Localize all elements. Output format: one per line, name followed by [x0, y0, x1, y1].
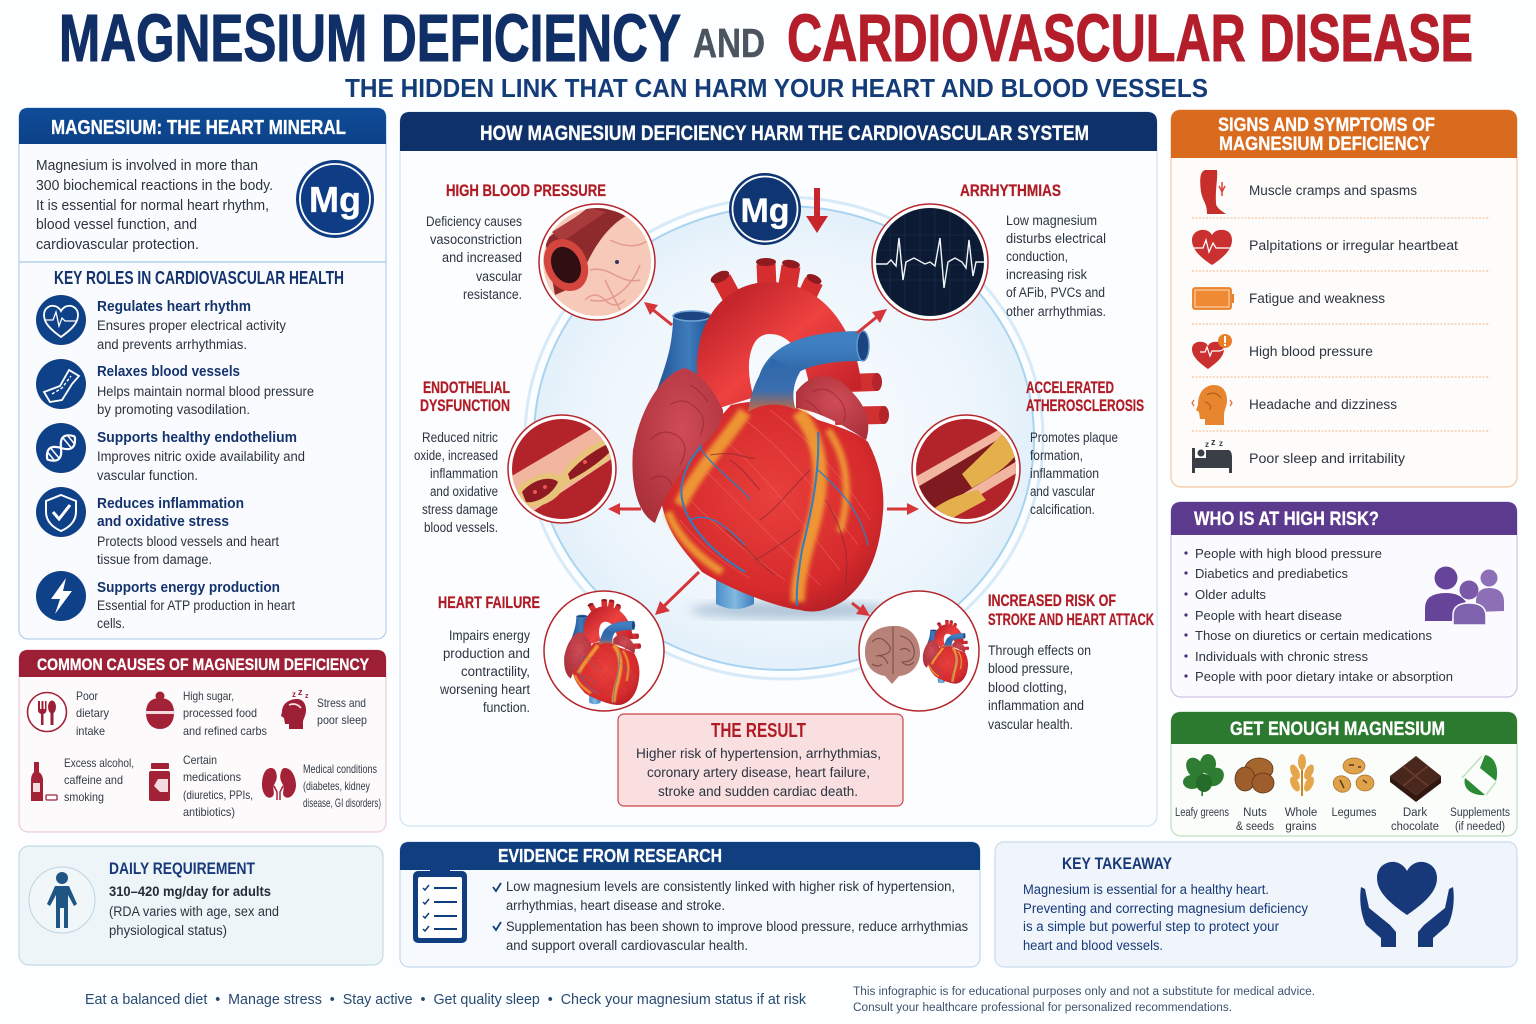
body text [414, 430, 498, 535]
risk header [1171, 502, 1517, 535]
cause: alcohol, caffeine, smoking: smoking [64, 790, 104, 804]
food: leafy greens: Leafy greens [1175, 807, 1229, 819]
illustration: brain and heart [859, 591, 979, 711]
evidence header [400, 842, 980, 870]
icon: heart rhythm [36, 295, 86, 345]
callout: the result [618, 714, 903, 806]
subtitle: THE HIDDEN LINK THAT CAN HARM YOUR HEART AND BLOOD VESSELS [345, 73, 1208, 103]
intro paragraph [36, 158, 273, 253]
body text: blood vessels. [424, 520, 498, 535]
icon: leg muscle [1200, 170, 1226, 214]
body text: Impairs energy [449, 628, 530, 643]
cause: stress and poor sleep: Stress and [317, 696, 366, 710]
symptom: muscle cramps: Muscle cramps and spasms [1249, 183, 1417, 198]
risk list: People with poor dietary intake or absorption [1195, 669, 1453, 684]
cause: certain medications: (diuretics, PPIs, [183, 788, 253, 802]
symptom: muscle cramps [1200, 170, 1417, 214]
food: legumes [1330, 758, 1377, 819]
role: reduces inflammation: Protects blood vessels and heart [97, 534, 279, 549]
takeaway text: Preventing and correcting magnesium deficiency [1023, 901, 1308, 916]
icon: capsules [1462, 755, 1497, 795]
symptom: palpitations: Palpitations or irregular heartbeat [1249, 238, 1458, 253]
role: supports energy production: Essential for ATP production in heart [97, 598, 295, 613]
icon: heart with alert [1192, 334, 1232, 369]
callout: the result: stroke and sudden cardiac death. [658, 784, 858, 799]
cause: alcohol, caffeine, smoking [31, 756, 134, 804]
food: supplements: Supplements [1450, 807, 1510, 819]
illustration: ecg monitor [872, 204, 988, 320]
panel: magnesium the heart mineral [19, 108, 386, 639]
panel: daily requirement [19, 846, 383, 965]
callout: the result: THE RESULT [711, 720, 806, 742]
symptom: headache: Headache and dizziness [1249, 397, 1397, 412]
panel header [19, 108, 386, 144]
takeaway text [1023, 882, 1308, 953]
topic: accelerated atherosclerosis: ATHEROSCLEROSIS [1026, 396, 1144, 415]
icon: nuts [1235, 758, 1274, 793]
icon: bed with zzz [1192, 437, 1232, 473]
icon: cake [145, 692, 175, 729]
topic: endothelial dysfunction [414, 378, 625, 535]
role: regulates heart rhythm: and prevents arrhythmias. [97, 337, 247, 352]
body text: blood clotting, [988, 680, 1067, 695]
symptom: poor sleep [1192, 437, 1405, 473]
intro paragraph: It is essential for normal heart rhythm, [36, 198, 269, 214]
title: AND [693, 20, 765, 66]
role: supports healthy endothelium: Improves nitric oxide availability and [97, 449, 305, 464]
body text [988, 643, 1091, 732]
body text: Low magnesium [1006, 213, 1097, 228]
takeaway text: heart and blood vessels. [1023, 938, 1163, 953]
intro paragraph: Magnesium is involved in more than [36, 158, 258, 174]
evidence points: Low magnesium levels are consistently linked with higher risk of hypertension, [506, 879, 955, 894]
icon: blood vessel [36, 359, 86, 409]
illustration: enlarged heart [544, 591, 664, 711]
key roles heading: KEY ROLES IN CARDIOVASCULAR HEALTH [54, 268, 344, 288]
food: leafy greens [1175, 754, 1229, 819]
muscle striations [680, 410, 870, 585]
evidence points: arrhythmias, heart disease and stroke. [506, 898, 725, 913]
causes heading: COMMON CAUSES OF MAGNESIUM DEFICIENCY [37, 655, 370, 674]
food: supplements: (if needed) [1455, 821, 1505, 833]
intro paragraph: blood vessel function, and [36, 217, 197, 233]
icon: person [29, 867, 95, 933]
cause: stress and poor sleep: poor sleep [317, 713, 367, 727]
center header [400, 112, 1157, 151]
center heading: HOW MAGNESIUM DEFICIENCY HARM THE CARDIOVASCULAR SYSTEM [480, 122, 1089, 145]
ventricles [662, 401, 883, 612]
topic: arrhythmias [872, 181, 1106, 320]
body text: inflammation [430, 466, 498, 481]
pulmonary veins [820, 373, 889, 424]
evidence points: and support overall cardiovascular health. [506, 938, 748, 953]
panel: who is at high risk [1171, 502, 1517, 697]
takeaway text: is a simple but powerful step to protect your [1023, 919, 1279, 934]
signs heading [1218, 115, 1435, 155]
panel: get enough magnesium [1171, 712, 1517, 836]
body text: worsening heart [439, 682, 530, 697]
cause: certain medications [149, 753, 253, 819]
food: nuts and seeds: Nuts [1243, 807, 1267, 819]
panel: evidence from research [400, 842, 980, 967]
role: supports healthy endothelium [36, 423, 305, 483]
cause: sugar and processed food [145, 689, 267, 738]
role: relaxes blood vessels: by promoting vasodilation. [97, 402, 250, 417]
icon: head with zzz: z [305, 693, 309, 700]
risk list: Those on diuretics or certain medications [1195, 628, 1432, 643]
evidence points: Supplementation has been shown to improve blood pressure, reduce arrhythmias [506, 919, 968, 934]
body text: conduction, [1006, 249, 1068, 264]
risk list: People with heart disease [1195, 608, 1342, 623]
cause: stress and poor sleep [281, 687, 367, 729]
evidence points [493, 879, 968, 953]
cause: alcohol, caffeine, smoking: caffeine and [64, 773, 123, 787]
body text: function. [483, 700, 530, 715]
role: relaxes blood vessels: Helps maintain normal blood pressure [97, 384, 314, 399]
icon: lightning bolt [36, 571, 86, 621]
food: whole grains [1285, 754, 1317, 833]
body text: oxide, increased [414, 448, 498, 463]
icon: dna [36, 423, 86, 473]
topic: arrhythmias: ARRHYTHMIAS [960, 181, 1061, 200]
causes header [19, 650, 386, 677]
topic: endothelial dysfunction: DYSFUNCTION [420, 396, 510, 415]
food: nuts and seeds: & seeds [1236, 821, 1274, 833]
topic: stroke and heart attack [859, 591, 1154, 732]
role: supports energy production: cells. [97, 616, 125, 631]
symptom: fatigue: Fatigue and weakness [1249, 291, 1385, 306]
topic: heart failure [438, 591, 664, 715]
body text [1006, 213, 1106, 319]
symptom: palpitations [1192, 230, 1458, 265]
role: reduces inflammation: and oxidative stress [97, 514, 229, 530]
body text: stress damage [422, 502, 498, 517]
body text: inflammation and [988, 698, 1084, 713]
icon: people group [1425, 566, 1504, 625]
cause: medical conditions: Medical conditions [303, 762, 377, 776]
body text: and vascular [1030, 484, 1095, 499]
icon: bed with zzz: z [1205, 440, 1209, 449]
role: relaxes blood vessels: Relaxes blood vessels [97, 364, 240, 380]
risk list: Individuals with chronic stress [1195, 649, 1368, 664]
cause: sugar and processed food: and refined carbs [183, 724, 267, 738]
evidence heading: EVIDENCE FROM RESEARCH [498, 846, 722, 866]
body text: inflammation [1030, 466, 1099, 481]
topic: stroke and heart attack: INCREASED RISK OF [988, 591, 1116, 610]
body text: and oxidative [430, 484, 498, 499]
disclaimer: Consult your healthcare professional for personalized recommendations. [853, 1002, 1232, 1014]
magnesium header [1171, 712, 1517, 744]
icon: kidneys [262, 768, 296, 800]
callout: the result: coronary artery disease, heart failure, [647, 765, 870, 780]
aortic branches [709, 258, 823, 320]
cause: certain medications: medications [183, 770, 241, 784]
risk list: Diabetics and prediabetics [1195, 566, 1348, 581]
cause: poor dietary intake: intake [76, 724, 105, 738]
icon: head with zzz: z [298, 687, 303, 697]
body text: Through effects on [988, 643, 1091, 658]
role: supports healthy endothelium: vascular function. [97, 468, 198, 483]
symptom: poor sleep: Poor sleep and irritability [1249, 451, 1405, 466]
daily requirement note: physiological status) [109, 923, 227, 938]
coronary vessels [681, 432, 868, 606]
body text: increasing risk [1006, 267, 1087, 282]
panel: how deficiency harms the cardiovascular system [400, 112, 1157, 826]
illustration: plaque in artery [910, 415, 1030, 525]
aorta arch [723, 308, 836, 405]
role: reduces inflammation [36, 487, 279, 567]
daily requirement value: 310–420 mg/day for adults [109, 884, 271, 899]
topic: high blood pressure [426, 181, 655, 320]
symptom: headache [1192, 385, 1397, 425]
cause: poor dietary intake: dietary [76, 706, 109, 720]
symptom: fatigue [1193, 288, 1385, 309]
title [59, 1, 1473, 76]
icon: head with zzz [281, 687, 309, 729]
topic: endothelial dysfunction: ENDOTHELIAL [423, 378, 510, 397]
icon: clipboard [413, 867, 467, 943]
icon: Mg badge with down arrow: Mg [740, 192, 790, 230]
arrow: to stroke and heart attack [852, 603, 870, 616]
icon: head with zzz: z [292, 690, 296, 699]
cause: poor dietary intake [28, 689, 109, 738]
heart shadow [690, 601, 890, 619]
food: whole grains: Whole [1285, 807, 1317, 819]
coronary branches [710, 454, 847, 585]
magnesium heading: GET ENOUGH MAGNESIUM [1230, 719, 1445, 740]
arrow: to arrhythmias [857, 309, 887, 333]
role: regulates heart rhythm [36, 295, 286, 352]
cause: poor dietary intake: Poor [76, 689, 98, 703]
panel: key takeaway [995, 842, 1517, 967]
body text: contractility, [461, 664, 530, 679]
signs heading: MAGNESIUM DEFICIENCY [1219, 134, 1430, 155]
body text [426, 214, 522, 302]
illustration: damaged vessel [505, 415, 625, 523]
body text: vasoconstriction [430, 232, 522, 247]
background ring [525, 197, 1043, 679]
topic: stroke and heart attack: STROKE AND HEART ATTACK [988, 610, 1154, 629]
icon: heart with pulse [1192, 230, 1233, 265]
arrows from heart [608, 302, 919, 616]
body text: Reduced nitric [422, 430, 498, 445]
food: nuts and seeds [1235, 758, 1274, 833]
role: reduces inflammation: tissue from damage. [97, 552, 212, 567]
coronary fat [668, 412, 846, 602]
risk list: People with high blood pressure [1195, 546, 1382, 561]
inferior vena cava [716, 570, 754, 609]
risk heading: WHO IS AT HIGH RISK? [1194, 509, 1379, 530]
role: supports energy production [36, 571, 295, 631]
pulmonary artery [748, 331, 869, 412]
right atrium upper [796, 376, 868, 440]
body text: vascular [476, 269, 522, 284]
icon: spinach [1183, 754, 1228, 796]
symptom: high blood pressure: High blood pressure [1249, 344, 1373, 359]
icon: pill jar [149, 763, 170, 801]
icon: fork and spoon [28, 692, 66, 732]
role: regulates heart rhythm: Regulates heart rhythm [97, 299, 251, 315]
topic: heart failure: HEART FAILURE [438, 593, 540, 612]
illustration: artery and tissue [536, 204, 655, 320]
panel: signs and symptoms [1171, 110, 1517, 487]
icon: head [1192, 385, 1232, 425]
panel: common causes [19, 650, 386, 832]
body text: and increased [442, 250, 522, 265]
cause: medical conditions: disease, GI disorders) [303, 796, 381, 810]
role: regulates heart rhythm: Ensures proper electrical activity [97, 318, 286, 333]
icon: low battery [1193, 288, 1234, 309]
risk list: Older adults [1195, 587, 1267, 602]
food: dark chocolate: Dark [1403, 807, 1427, 819]
role: reduces inflammation: Reduces inflammation [97, 496, 244, 512]
body text: other arrhythmias. [1006, 304, 1106, 319]
cause: sugar and processed food: High sugar, [183, 689, 234, 703]
signs heading: SIGNS AND SYMPTOMS OF [1218, 115, 1435, 136]
topic: accelerated atherosclerosis: ACCELERATED [1026, 378, 1114, 397]
food: whole grains: grains [1285, 821, 1317, 833]
icon: bed with zzz: z [1211, 437, 1216, 447]
arrow: to high blood pressure [644, 302, 672, 325]
disclaimer [853, 986, 1315, 1014]
icon: bed with zzz: z [1219, 439, 1223, 448]
body text: formation, [1030, 448, 1083, 463]
daily requirement heading: DAILY REQUIREMENT [109, 860, 255, 878]
food: legumes: Legumes [1332, 807, 1377, 819]
icon: hands holding heart [1360, 862, 1454, 947]
body text [1030, 430, 1118, 517]
role: relaxes blood vessels [36, 359, 314, 417]
cause: alcohol, caffeine, smoking: Excess alcohol, [64, 756, 134, 770]
icon: Mg badge: Mg [309, 179, 361, 220]
food: dark chocolate: chocolate [1391, 821, 1439, 833]
topic: high blood pressure: HIGH BLOOD PRESSURE [446, 181, 606, 200]
food: supplements [1450, 755, 1510, 833]
symptom: high blood pressure [1192, 334, 1373, 369]
takeaway text: Magnesium is essential for a healthy heart. [1023, 882, 1269, 897]
role: supports energy production: Supports energy production [97, 580, 280, 596]
body text: of AFib, PVCs and [1006, 285, 1105, 300]
body text: resistance. [463, 287, 522, 302]
cause: medical conditions: (diabetes, kidney [303, 779, 370, 793]
signs header [1171, 110, 1517, 158]
cause: sugar and processed food: processed food [183, 706, 257, 720]
icon: Mg badge [296, 160, 374, 238]
title: MAGNESIUM DEFICIENCY [59, 1, 681, 76]
cause: certain medications: antibiotics) [183, 805, 235, 819]
intro paragraph: cardiovascular protection. [36, 237, 199, 253]
intro paragraph: 300 biochemical reactions in the body. [36, 178, 273, 194]
body text [439, 628, 530, 715]
icon: shield [36, 487, 86, 537]
icon: beans [1330, 758, 1374, 795]
panel heading: MAGNESIUM: THE HEART MINERAL [51, 117, 346, 139]
arrow: to atherosclerosis [887, 503, 919, 515]
takeaway heading: KEY TAKEAWAY [1062, 854, 1173, 873]
cause: medical conditions [262, 762, 381, 810]
footer tips: Eat a balanced diet • Manage stress • Stay active • Get quality sleep • Check your magnesium status if at risk [85, 992, 807, 1008]
food: dark chocolate [1390, 756, 1441, 833]
atrium texture [650, 385, 845, 485]
left atrium [632, 368, 723, 523]
arrow: to heart failure [655, 572, 699, 615]
body text: vascular health. [988, 717, 1073, 732]
body text: production and [443, 646, 530, 661]
icon: chocolate [1390, 756, 1441, 802]
superior vena cava [655, 311, 711, 395]
cause: certain medications: Certain [183, 753, 217, 767]
arrow: to endothelial dysfunction [608, 503, 641, 515]
role: supports healthy endothelium: Supports healthy endothelium [97, 430, 297, 446]
icon: wheat [1288, 754, 1316, 796]
icon: Mg badge with down arrow [729, 173, 828, 245]
icon: bottle and cigarette [31, 762, 57, 801]
callout: the result: Higher risk of hypertension, arrhythmias, [636, 746, 881, 761]
body text: calcification. [1030, 502, 1095, 517]
body text: Promotes plaque [1030, 430, 1118, 445]
daily requirement note: (RDA varies with age, sex and [109, 904, 279, 919]
risk list [1184, 546, 1453, 684]
body text: disturbs electrical [1006, 231, 1106, 246]
topic: accelerated atherosclerosis [910, 378, 1144, 525]
heart illustration [632, 258, 889, 612]
body text: Deficiency causes [426, 214, 522, 229]
daily requirement note [109, 904, 279, 938]
disclaimer: This infographic is for educational purposes only and not a substitute for medical advice. [853, 986, 1315, 998]
body text: blood pressure, [988, 661, 1073, 676]
